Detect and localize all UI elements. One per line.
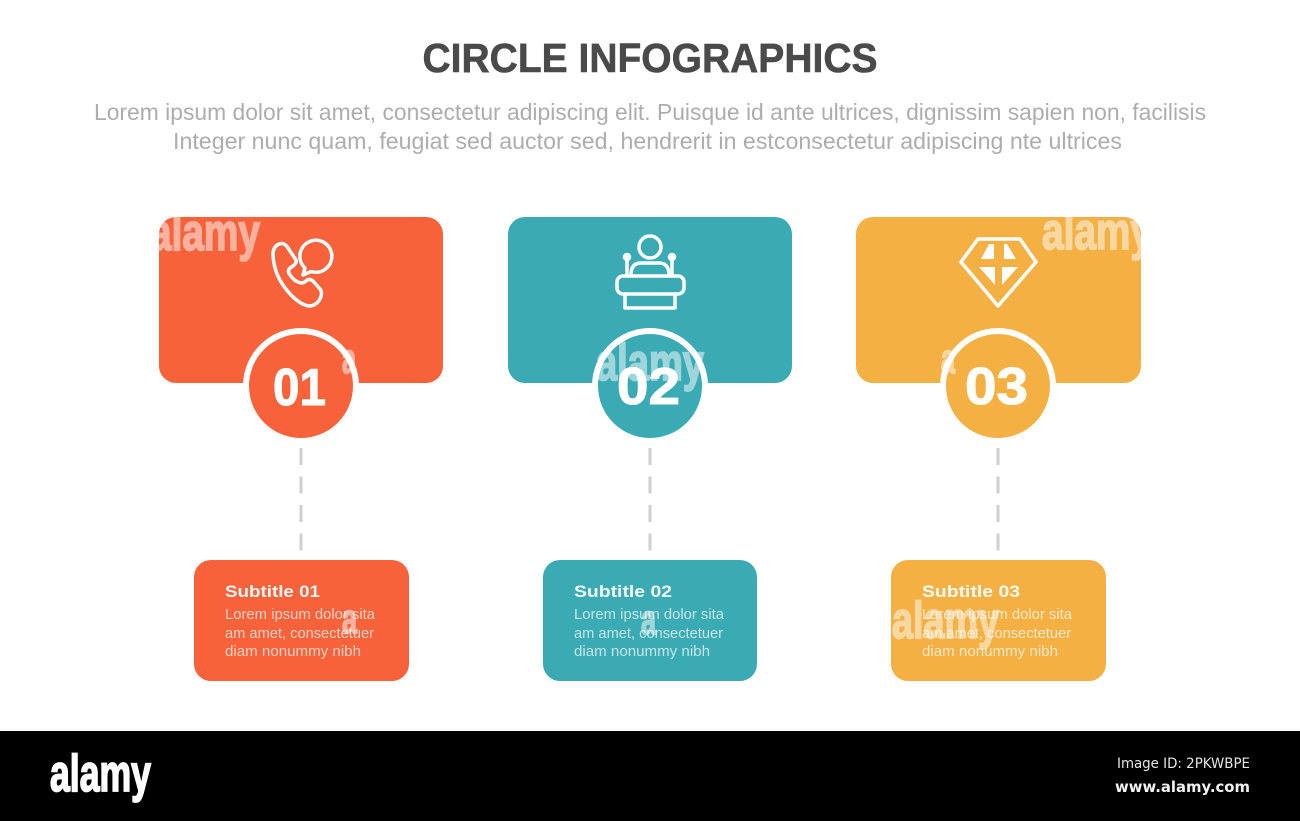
panel: subtitle 02 — [543, 560, 757, 681]
connector 03 — [996, 448, 1000, 551]
watermark on subtitle 03: alamy — [892, 592, 999, 650]
image id: Image ID: 2PKWBPE — [1117, 756, 1250, 772]
ring 03 — [940, 328, 1056, 444]
intro text: Lorem ipsum dolor sit amet, consectetur adipiscing elit. Puisque id ante ultrices, dignissim sapien non, facilisis — [94, 99, 1206, 125]
panel: step 01 header — [150, 204, 443, 444]
body 01 text: Lorem ipsum dolor sita — [225, 607, 376, 623]
title: CIRCLE INFOGRAPHICS — [422, 35, 878, 81]
icon: diamond — [961, 239, 1036, 306]
card 01 — [159, 217, 443, 383]
circle 01 — [249, 334, 353, 438]
watermark on card 03: alamy — [1042, 203, 1152, 261]
body 02 text: Lorem ipsum dolor sita — [574, 607, 725, 623]
body 01 text: am amet, consectetuer — [225, 626, 374, 642]
subtitle 02 text: Subtitle 02 — [574, 583, 672, 601]
body 02 text: am amet, consectetuer — [574, 626, 723, 642]
card 02 — [508, 217, 792, 383]
circle 03 — [946, 334, 1050, 438]
number 02: 02 — [617, 358, 680, 416]
watermark on card 02: alamy — [596, 334, 704, 392]
number 01: 01 — [273, 359, 326, 417]
watermark fragment 03: a — [941, 335, 955, 382]
body 02 text — [574, 607, 725, 660]
footer bar — [0, 731, 1300, 821]
body 02 text: diam nonummy nibh — [574, 644, 710, 660]
subtitle 01 text: Subtitle 01 — [225, 583, 320, 601]
ring 01 — [243, 328, 359, 444]
number 03: 03 — [965, 358, 1028, 416]
watermark fragment: a — [641, 596, 656, 643]
panel: subtitle 03 — [891, 560, 1106, 681]
watermark on card 01: alamy — [150, 204, 260, 262]
connector 02 — [648, 448, 652, 551]
card 03 — [856, 217, 1141, 383]
panel: step 02 header — [508, 217, 792, 444]
body 01 text — [225, 607, 376, 660]
website: www.alamy.com — [1115, 778, 1250, 796]
footer logo: alamy — [50, 745, 151, 803]
circle 02 — [598, 334, 702, 438]
panel: step 03 header — [856, 203, 1152, 444]
body 03 text — [922, 607, 1073, 660]
connector 01 — [300, 448, 302, 551]
subtitle 03 text: Subtitle 03 — [922, 583, 1020, 601]
icon: speaker at podium — [617, 236, 684, 308]
intro text — [94, 99, 1206, 154]
body 03 text: Lorem ipsum dolor sita — [922, 607, 1073, 623]
watermark fragment 01: a — [342, 335, 356, 382]
panel: subtitle 01 — [194, 560, 409, 681]
intro text: Integer nunc quam, feugiat sed auctor sed, hendrerit in estconsectetur adipiscing nte ultrices — [173, 128, 1122, 154]
icon: phone with speech bubble — [273, 240, 332, 306]
body 03 text: am amet, consectetuer — [922, 626, 1071, 642]
ring 02 — [592, 328, 708, 444]
body 01 text: diam nonummy nibh — [225, 644, 361, 660]
body 03 text: diam nonummy nibh — [922, 644, 1058, 660]
watermark fragment: a — [342, 595, 357, 642]
